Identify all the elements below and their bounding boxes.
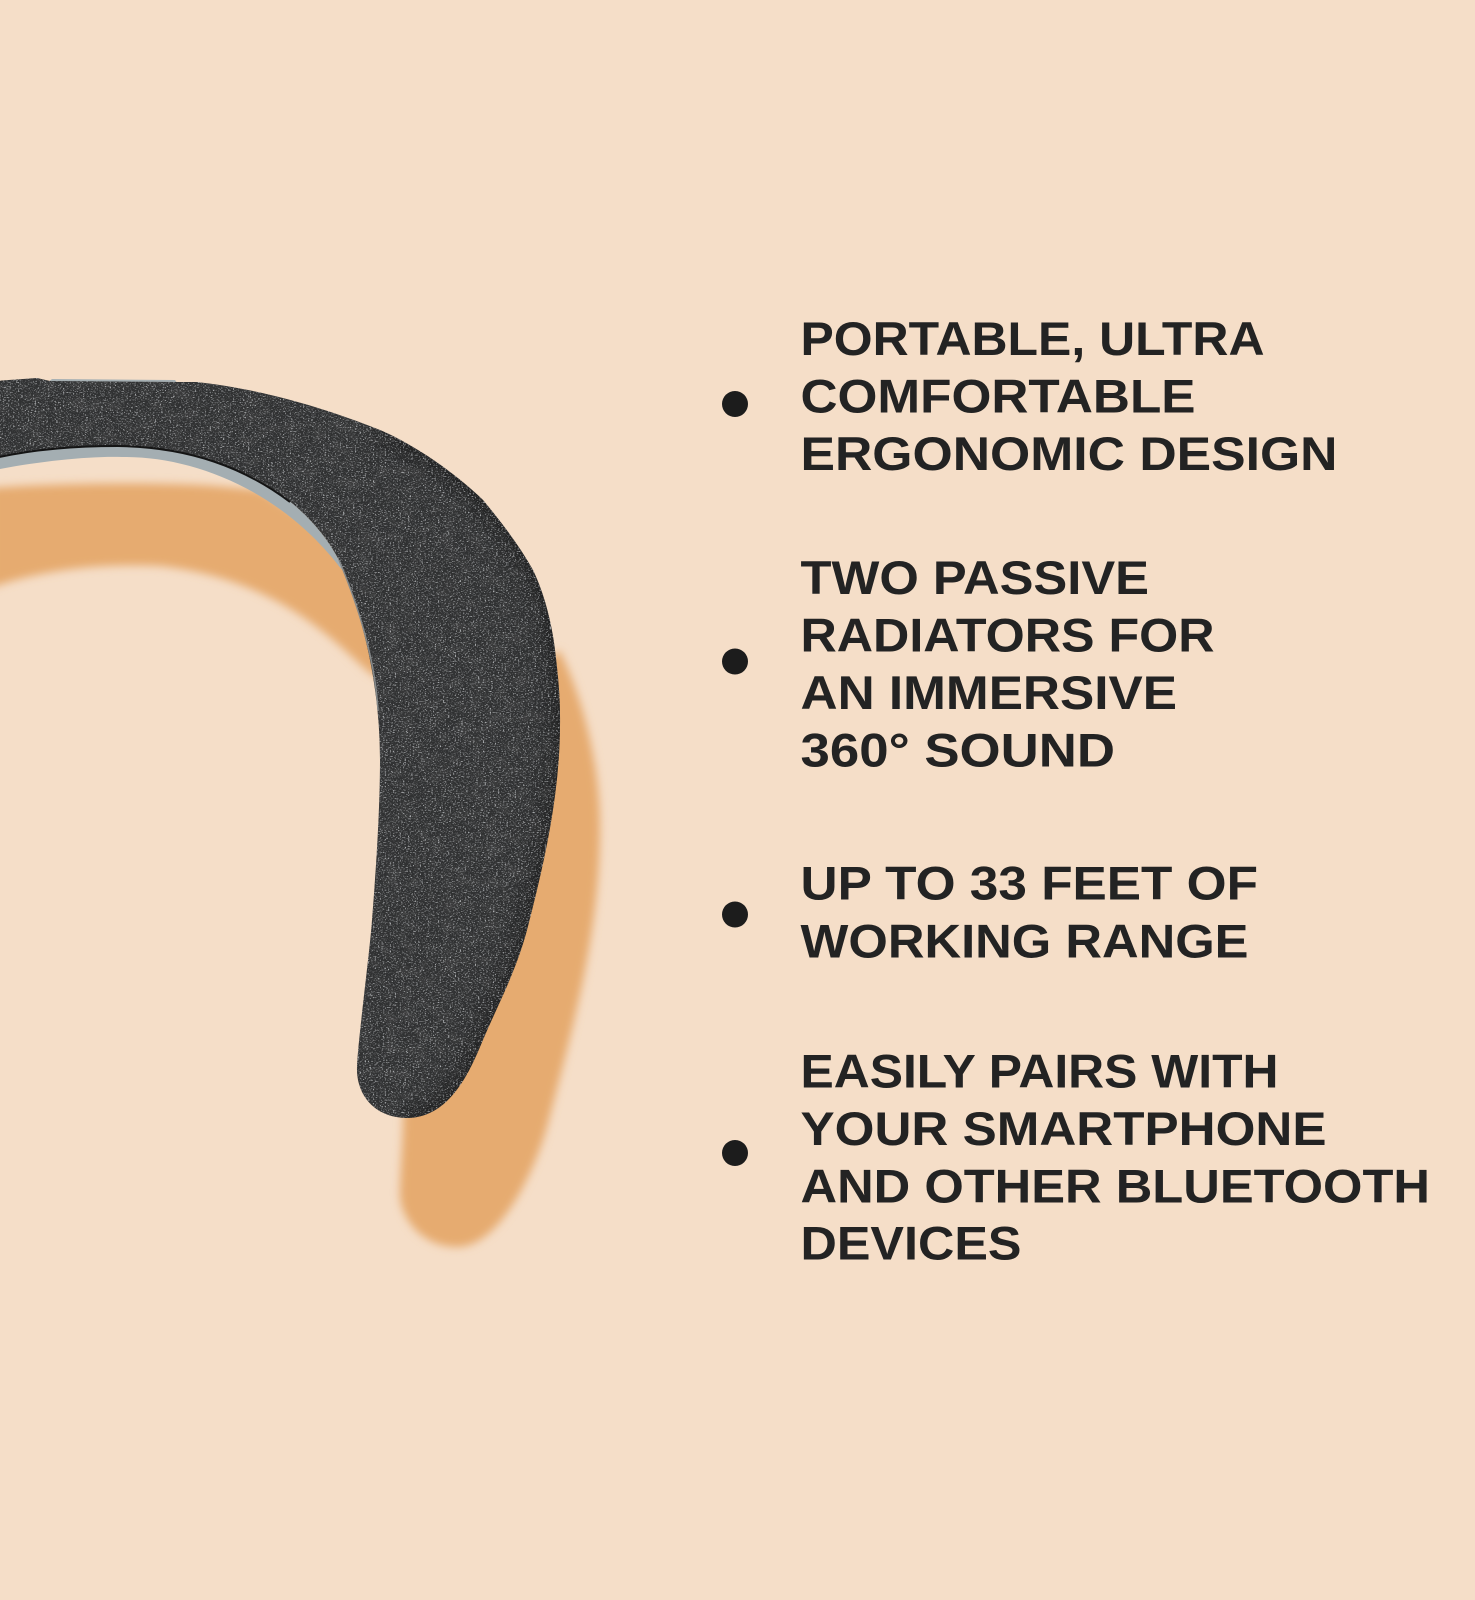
feature text: DEVICES <box>800 1216 1022 1270</box>
dark inner edge line <box>0 446 290 502</box>
grey inner rim <box>0 446 342 570</box>
bullet <box>722 1140 748 1166</box>
feature 2 <box>722 551 1214 776</box>
feature 1 <box>722 312 1338 480</box>
feature text <box>800 551 1214 776</box>
feature text: AND OTHER BLUETOOTH <box>800 1160 1430 1212</box>
feature text: AN IMMERSIVE <box>800 666 1177 719</box>
fabric band <box>0 370 575 1130</box>
feature text: UP TO 33 FEET OF <box>800 856 1258 910</box>
feature text <box>800 1044 1430 1270</box>
feature text: TWO PASSIVE <box>800 551 1149 604</box>
feature text <box>800 312 1338 480</box>
orange drop shadow <box>0 484 600 1247</box>
feature 4 <box>722 1044 1430 1270</box>
feature text: ERGONOMIC DESIGN <box>800 427 1338 480</box>
bullet <box>722 902 748 928</box>
thin grey inner edge <box>339 560 378 710</box>
feature text: YOUR SMARTPHONE <box>800 1102 1326 1155</box>
feature 3 <box>722 856 1258 968</box>
product image: neckband speaker <box>0 370 600 1247</box>
feature text: EASILY PAIRS WITH <box>800 1044 1278 1098</box>
feature text: PORTABLE, ULTRA <box>800 312 1264 365</box>
feature text: 360° SOUND <box>800 724 1115 776</box>
bullet <box>722 648 748 674</box>
feature text: COMFORTABLE <box>800 370 1196 422</box>
bullet <box>722 391 748 417</box>
infographic canvas <box>0 322 1427 1260</box>
grey top rim <box>48 379 178 384</box>
feature text: RADIATORS FOR <box>800 608 1214 662</box>
feature text <box>800 856 1258 968</box>
feature text: WORKING RANGE <box>800 914 1248 968</box>
